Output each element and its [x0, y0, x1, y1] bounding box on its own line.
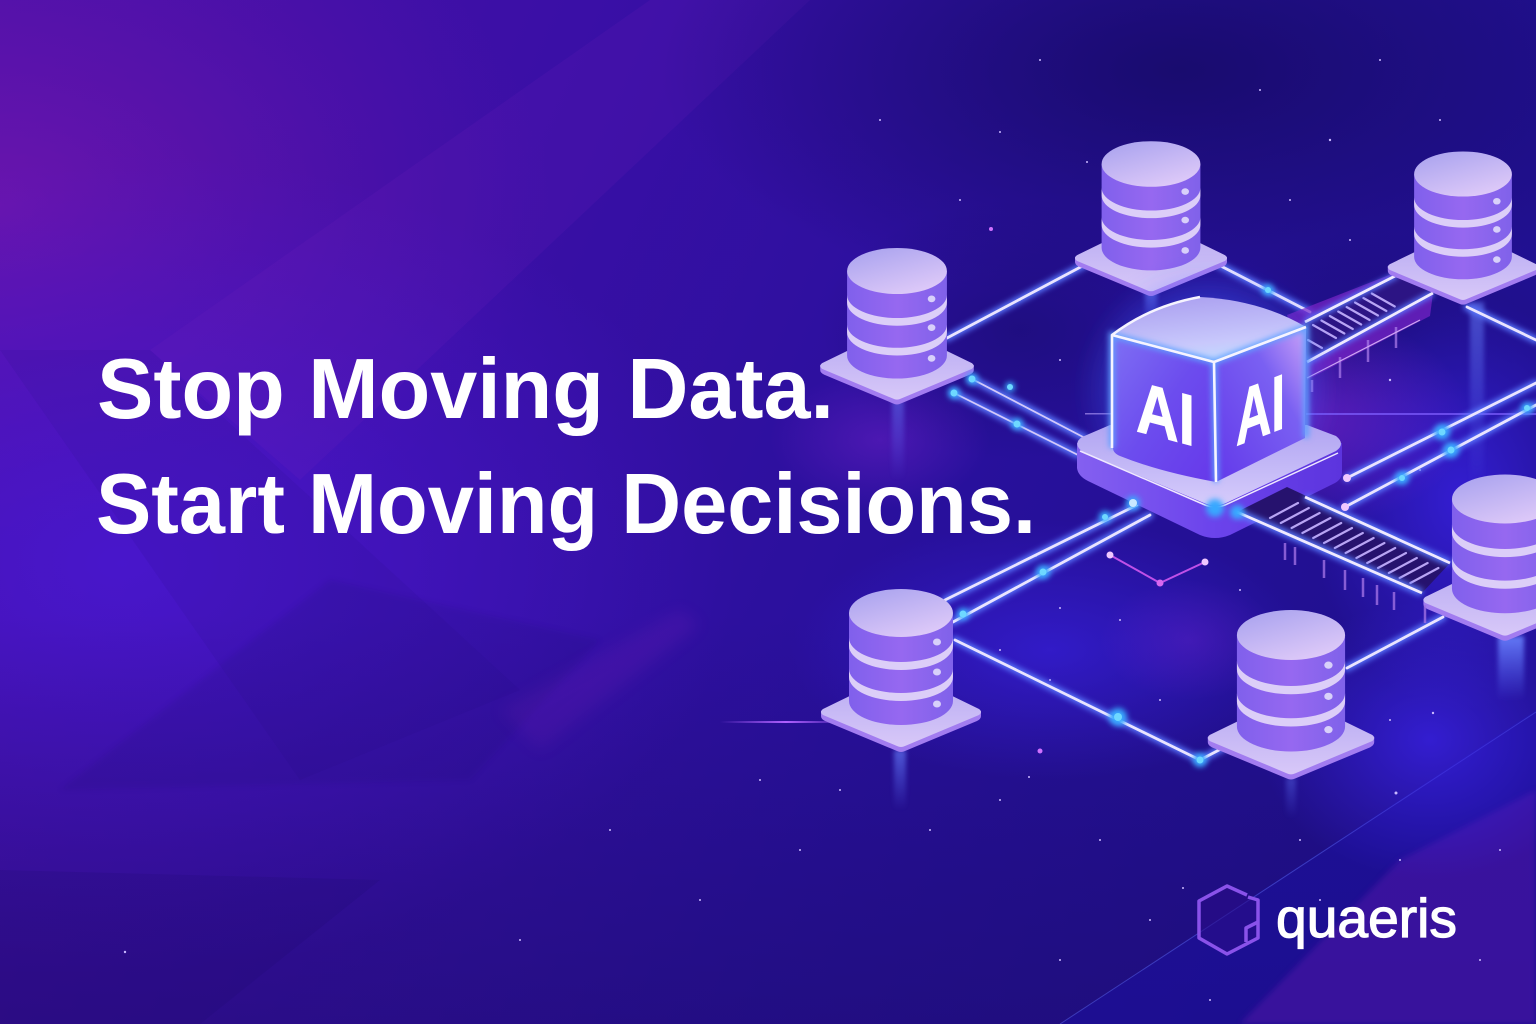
- cube edges: [1112, 297, 1306, 482]
- database: top right: [1388, 151, 1536, 305]
- logo hexagon icon: [1199, 886, 1258, 954]
- AI cube on platform: [1077, 265, 1342, 538]
- pink circuit trace: [1110, 555, 1205, 583]
- AI label: right face: AI: [1236, 358, 1285, 463]
- headline line 2: Start Moving Decisions.: [96, 457, 1036, 552]
- thin lines to platform: [954, 379, 1085, 455]
- cube right face: [1214, 327, 1306, 482]
- line glow: [945, 262, 1536, 760]
- AI label: left face: AI: [1136, 366, 1195, 462]
- bridge: upper right: [1287, 272, 1433, 392]
- lower-right lit plane: [1060, 710, 1536, 1024]
- bridge: lower right: [1237, 487, 1450, 623]
- glowing nodes: [948, 284, 1533, 767]
- cube top face: [1112, 297, 1306, 362]
- background glow rays: [720, 286, 1536, 818]
- headline line 1: Stop Moving Data.: [97, 342, 834, 437]
- platform: [1077, 425, 1342, 538]
- logo wordmark: quaeris: [1276, 887, 1457, 949]
- connector lines: [945, 262, 1536, 760]
- database: top center: [1075, 141, 1227, 296]
- headline: [96, 342, 1036, 552]
- logo: quaeris: [1199, 886, 1457, 954]
- database: bottom left: [821, 589, 981, 752]
- cube edge glow: [1112, 327, 1306, 482]
- bright lines: [945, 262, 1536, 760]
- database: right: [1423, 475, 1536, 641]
- cube left face: [1112, 335, 1216, 482]
- database: bottom center: [1208, 610, 1374, 780]
- database: top left: [820, 248, 974, 404]
